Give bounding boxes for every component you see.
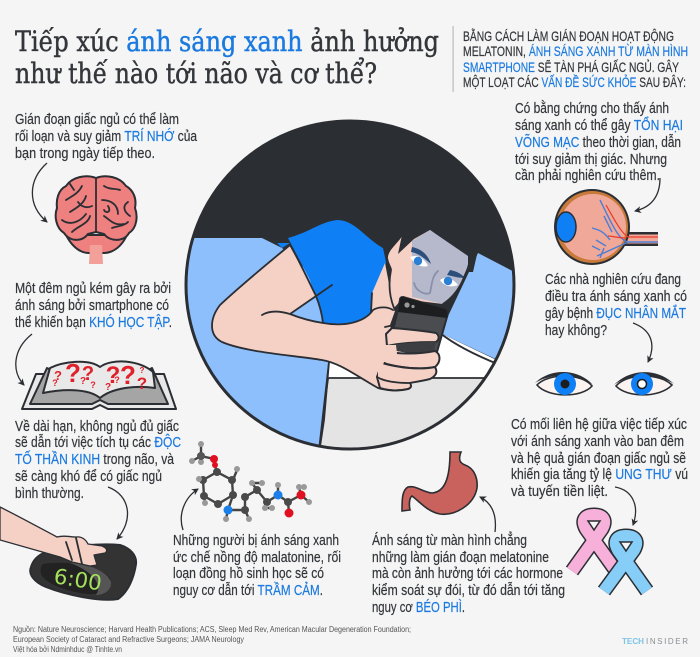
source footer: European Society of Cataract and Refractive Surgeons; JAMA Neurology (13, 635, 244, 644)
pink ribbon (572, 515, 616, 571)
source footer: Nguồn: Nature Neuroscience; Harvard Health Publications; ACS, Sleep Med Rev, American Macular Degeneration Foundation; (13, 625, 411, 634)
text: neurotoxins: sẽ dẫn tới việc tích tụ các ĐỘC (15, 434, 181, 451)
blue ribbon (604, 536, 647, 591)
text: neurotoxins: Về dài hạn, không ngủ đủ giấc (15, 418, 179, 435)
arrow to eyes (633, 323, 652, 362)
arrow to ribbons (615, 487, 636, 525)
text: neurotoxins: bình thường. (15, 485, 84, 502)
icon: book: ? (90, 380, 96, 390)
text: depression (173, 532, 341, 599)
icon: eyeball (554, 189, 658, 265)
text: memory: Gián đoạn giấc ngủ có thể làm (15, 111, 179, 128)
text: retinal damage: tới suy giảm thị giác. Nhưng (515, 151, 667, 168)
source footer: Việt hóa bởi Ndminhduc @ Tinhte.vn (13, 645, 122, 654)
icon: book: ? (140, 366, 145, 375)
illustration: person using smartphone in bed (180, 120, 530, 460)
eye with dark pupil (535, 372, 593, 395)
intro text block: MỘT LOẠT CÁC VẤN ĐỀ SỨC KHỎE SAU ĐÂY: (463, 73, 686, 90)
title (15, 25, 439, 90)
text: retinal damage: cần phải nghiên cứu thêm. (515, 167, 660, 184)
text: neurotoxins (15, 418, 181, 502)
text: memory: bạn trong ngày tiếp theo. (15, 145, 155, 162)
text: learning: Một đêm ngủ kém gây ra bởi (15, 280, 171, 297)
text: obesity: những làm gián đoạn melatonine (372, 549, 549, 566)
logo: Tech Insider (622, 637, 688, 646)
source footer (13, 625, 411, 654)
text: obesity: mà còn ảnh hưởng tới các hormone (372, 565, 563, 582)
logo: Tech Insider: INSIDER (646, 637, 688, 646)
text: cataract: hay không? (545, 322, 607, 339)
text: neurotoxins: sẽ càng khó để có giấc ngủ (15, 468, 162, 485)
logo: Tech Insider: TECH (622, 637, 644, 646)
icon: alarm clock with hand: 6:00 (52, 564, 103, 595)
arrow to molecule (181, 489, 198, 530)
text: learning: thể khiến bạn KHÓ HỌC TẬP. (15, 314, 172, 331)
text: neurotoxins: TỐ THẦN KINH trong não, và (15, 450, 175, 468)
icon: book: ? (65, 358, 81, 388)
icon: book: ? (54, 368, 62, 383)
shirt (277, 220, 386, 326)
text: obesity: Ánh sáng từ màn hình chẳng (372, 531, 527, 549)
arrow to stomach (480, 497, 495, 532)
arm and palm (212, 245, 411, 391)
icon: book: ? (106, 362, 120, 389)
text: cancer: và tuyến tiền liệt. (511, 483, 608, 500)
text: retinal damage (515, 100, 683, 184)
text: obesity (372, 531, 565, 616)
icon: book: ? (114, 375, 120, 385)
text: learning (15, 280, 172, 331)
arrow to brain (32, 163, 47, 222)
text: depression: Những người bị ánh sáng xanh (173, 532, 339, 549)
phone (391, 297, 448, 352)
title: như thế nào tới não và cơ thể? (15, 57, 377, 90)
text: depression: loạn đồng hồ sinh học sẽ có (173, 565, 324, 582)
icon: pair of eyes (535, 372, 674, 395)
icon: awareness ribbons (572, 515, 647, 591)
icon: stomach (402, 452, 477, 514)
icon: book: ? (82, 363, 94, 385)
text: obesity: nguy cơ BÉO PHÌ. (372, 599, 465, 616)
title: Tiếp xúc ánh sáng xanh ảnh hưởng (15, 25, 439, 58)
text: cancer: khiến gia tăng tỷ lệ UNG THƯ vú (511, 466, 688, 483)
text: learning: ánh sáng bởi smartphone có (15, 297, 169, 314)
icon: molecule (189, 441, 312, 522)
icon: book: ? (52, 378, 58, 388)
text: cancer (511, 416, 688, 500)
intro text block (452, 26, 688, 92)
arrow to eyeball (635, 178, 660, 211)
fingers (377, 328, 440, 390)
text: memory: rối loạn và suy giảm TRÍ NHỚ của (15, 128, 198, 145)
arrow to book (16, 334, 32, 385)
icon: book: ? (137, 374, 147, 393)
icon: alarm clock with hand (0, 507, 136, 600)
icon: book (22, 358, 176, 409)
eye with cloudy pupil (614, 372, 674, 395)
icon: book: ? (80, 376, 86, 387)
text: retinal damage: sáng xanh có thể gây TỔN HẠI (515, 116, 683, 134)
text: memory (15, 111, 198, 162)
icon: book: ? (120, 360, 136, 390)
icon: book: ? (105, 382, 111, 393)
text: depression: ức chế nồng độ malatonine, rối (173, 549, 341, 566)
arrow to alarm clock (108, 487, 128, 539)
text: obesity: kiểm soát sự đói, từ đó dẫn tới tăng (372, 582, 565, 599)
text: depression: nguy cơ dẫn tới TRẦM CẢM. (173, 582, 323, 599)
icon: brain (56, 176, 137, 264)
text: cataract (545, 271, 687, 339)
neck and head (371, 230, 478, 312)
